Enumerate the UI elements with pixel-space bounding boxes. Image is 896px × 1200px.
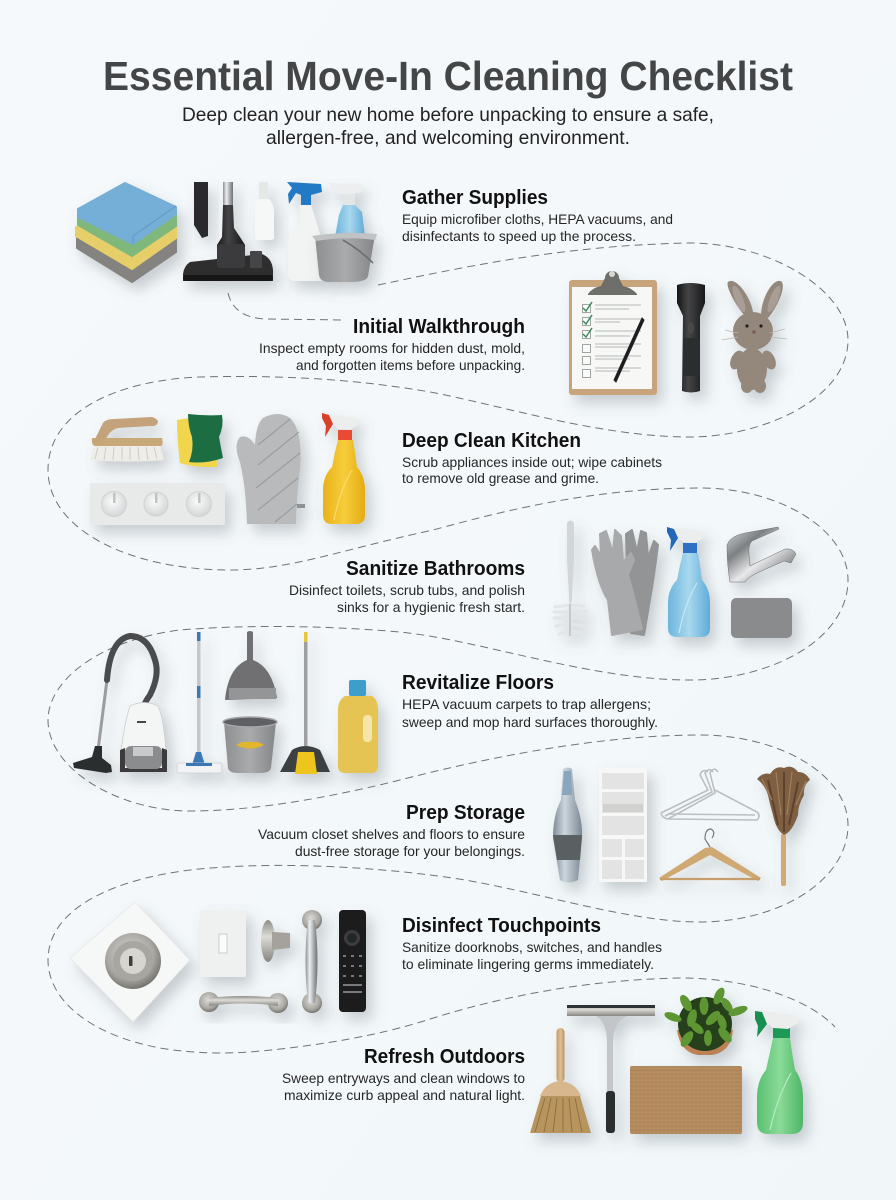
icon: horizontal door handle (199, 992, 288, 1013)
text: floors description (402, 696, 658, 730)
icon: blue spray bottle (667, 527, 710, 637)
icon: toilet brush (554, 520, 586, 636)
icon: grey bucket (223, 717, 277, 773)
icon: sponge (177, 414, 223, 467)
icon: stove knobs panel (90, 483, 225, 525)
panel: initial walkthrough (259, 271, 787, 395)
icon: push broom (280, 632, 330, 774)
icon: plush bunny (722, 281, 787, 393)
icon: feather duster (757, 767, 810, 886)
icon: white shelf unit (599, 768, 647, 882)
panel: disinfect touchpoints (70, 902, 662, 1022)
heading: gather supplies: Gather Supplies (402, 187, 548, 209)
icon: flashlight (677, 283, 705, 392)
text: touchpoints description: to eliminate lingering germs immediately. (402, 956, 654, 972)
text: storage description: Vacuum closet shelves and floors to ensure (258, 826, 525, 842)
panel: revitalize floors (73, 631, 658, 774)
icon: rubber gloves (592, 530, 658, 635)
text: touchpoints description (402, 939, 662, 972)
text: bathrooms description (289, 582, 525, 615)
panel: gather supplies (76, 182, 673, 282)
icon: microfiber cloth stack (76, 183, 176, 282)
heading: refresh outdoors: Refresh Outdoors (364, 1046, 525, 1068)
icon: chrome faucet (727, 527, 796, 582)
text: outdoors description: maximize curb appeal and natural light. (284, 1087, 525, 1103)
heading: disinfect touchpoints: Disinfect Touchpoints (402, 915, 601, 937)
icon: grey scouring pad (731, 598, 792, 638)
subtitle (182, 104, 714, 149)
icon: hand broom (530, 1028, 591, 1133)
text: kitchen description: to remove old grease and grime. (402, 470, 599, 486)
panel: refresh outdoors (282, 986, 803, 1134)
text: initial walkthrough description: Inspect empty rooms for hidden dust, mold, (259, 340, 525, 356)
subtitle: allergen-free, and welcoming environment. (266, 127, 630, 149)
icon: door knob on napkin (70, 902, 190, 1022)
icon: tv remote (339, 910, 366, 1012)
text: storage description (258, 826, 525, 859)
heading: sanitize bathrooms: Sanitize Bathrooms (346, 558, 525, 580)
icon: scrub brush (90, 417, 164, 462)
title: Essential Move-In Cleaning Checklist (103, 53, 793, 99)
heading: deep clean kitchen: Deep Clean Kitchen (402, 430, 581, 452)
text: floors description: sweep and mop hard surfaces thoroughly. (402, 714, 658, 730)
icon: blue spray bottle (287, 182, 322, 281)
text: outdoors description (282, 1070, 525, 1103)
icon: handheld vacuum (553, 768, 582, 882)
icon: vacuum floor head (183, 182, 273, 281)
text: floors description: HEPA vacuum carpets to trap allergens; (402, 696, 651, 712)
icon: mop (177, 632, 222, 773)
icon: blue liquid spray bottle (330, 183, 365, 237)
heading: revitalize floors: Revitalize Floors (402, 672, 554, 694)
icon: yellow spray bottle (322, 413, 365, 524)
text: initial walkthrough description: and forgotten items before unpacking. (296, 357, 525, 373)
icon: yellow floor cleaner jug (338, 680, 378, 773)
text: bathrooms description: sinks for a hygienic fresh start. (337, 599, 525, 615)
text: gather supplies description: Equip microfiber cloths, HEPA vacuums, and (402, 211, 673, 227)
dashed connector path (48, 243, 848, 1053)
icon: dustpan (225, 631, 277, 700)
subtitle: Deep clean your new home before unpacking to ensure a safe, (182, 104, 714, 126)
panel: deep clean kitchen (90, 413, 662, 525)
text: storage description: dust-free storage for your belongings. (295, 843, 525, 859)
heading: initial walkthrough: Initial Walkthrough (353, 316, 525, 338)
text: bathrooms description: Disinfect toilets, scrub tubs, and polish (289, 582, 525, 598)
icon: small cabinet knob (261, 920, 290, 962)
icon: small white bottle (255, 182, 274, 240)
text: gather supplies description (402, 211, 673, 244)
text: gather supplies description: disinfectants to speed up the process. (402, 228, 636, 244)
icon: coir doormat (630, 1066, 742, 1134)
icon: clipboard checklist (569, 271, 657, 395)
text: initial walkthrough description (259, 340, 525, 373)
icon: wire hangers (661, 769, 759, 820)
panel: prep storage (258, 767, 810, 886)
text: touchpoints description: Sanitize doorknobs, switches, and handles (402, 939, 662, 955)
text: outdoors description: Sweep entryways and clean windows to (282, 1070, 525, 1086)
text: kitchen description: Scrub appliances inside out; wipe cabinets (402, 454, 662, 470)
icon: green spray bottle (755, 1011, 803, 1134)
icon: potted plant (663, 986, 749, 1055)
icon: canister vacuum (73, 636, 167, 773)
text: kitchen description (402, 454, 662, 486)
icon: window squeegee (567, 1005, 655, 1133)
icon: light switch (200, 910, 246, 977)
panel: sanitize bathrooms (289, 520, 796, 638)
icon: oven mitt (236, 414, 305, 524)
icon: grey bucket (312, 233, 377, 282)
icon: wooden hanger (659, 829, 761, 881)
icon: vertical door handle (302, 910, 322, 1013)
icon: vacuum crevice tool (194, 182, 208, 238)
heading: prep storage: Prep Storage (406, 802, 525, 824)
